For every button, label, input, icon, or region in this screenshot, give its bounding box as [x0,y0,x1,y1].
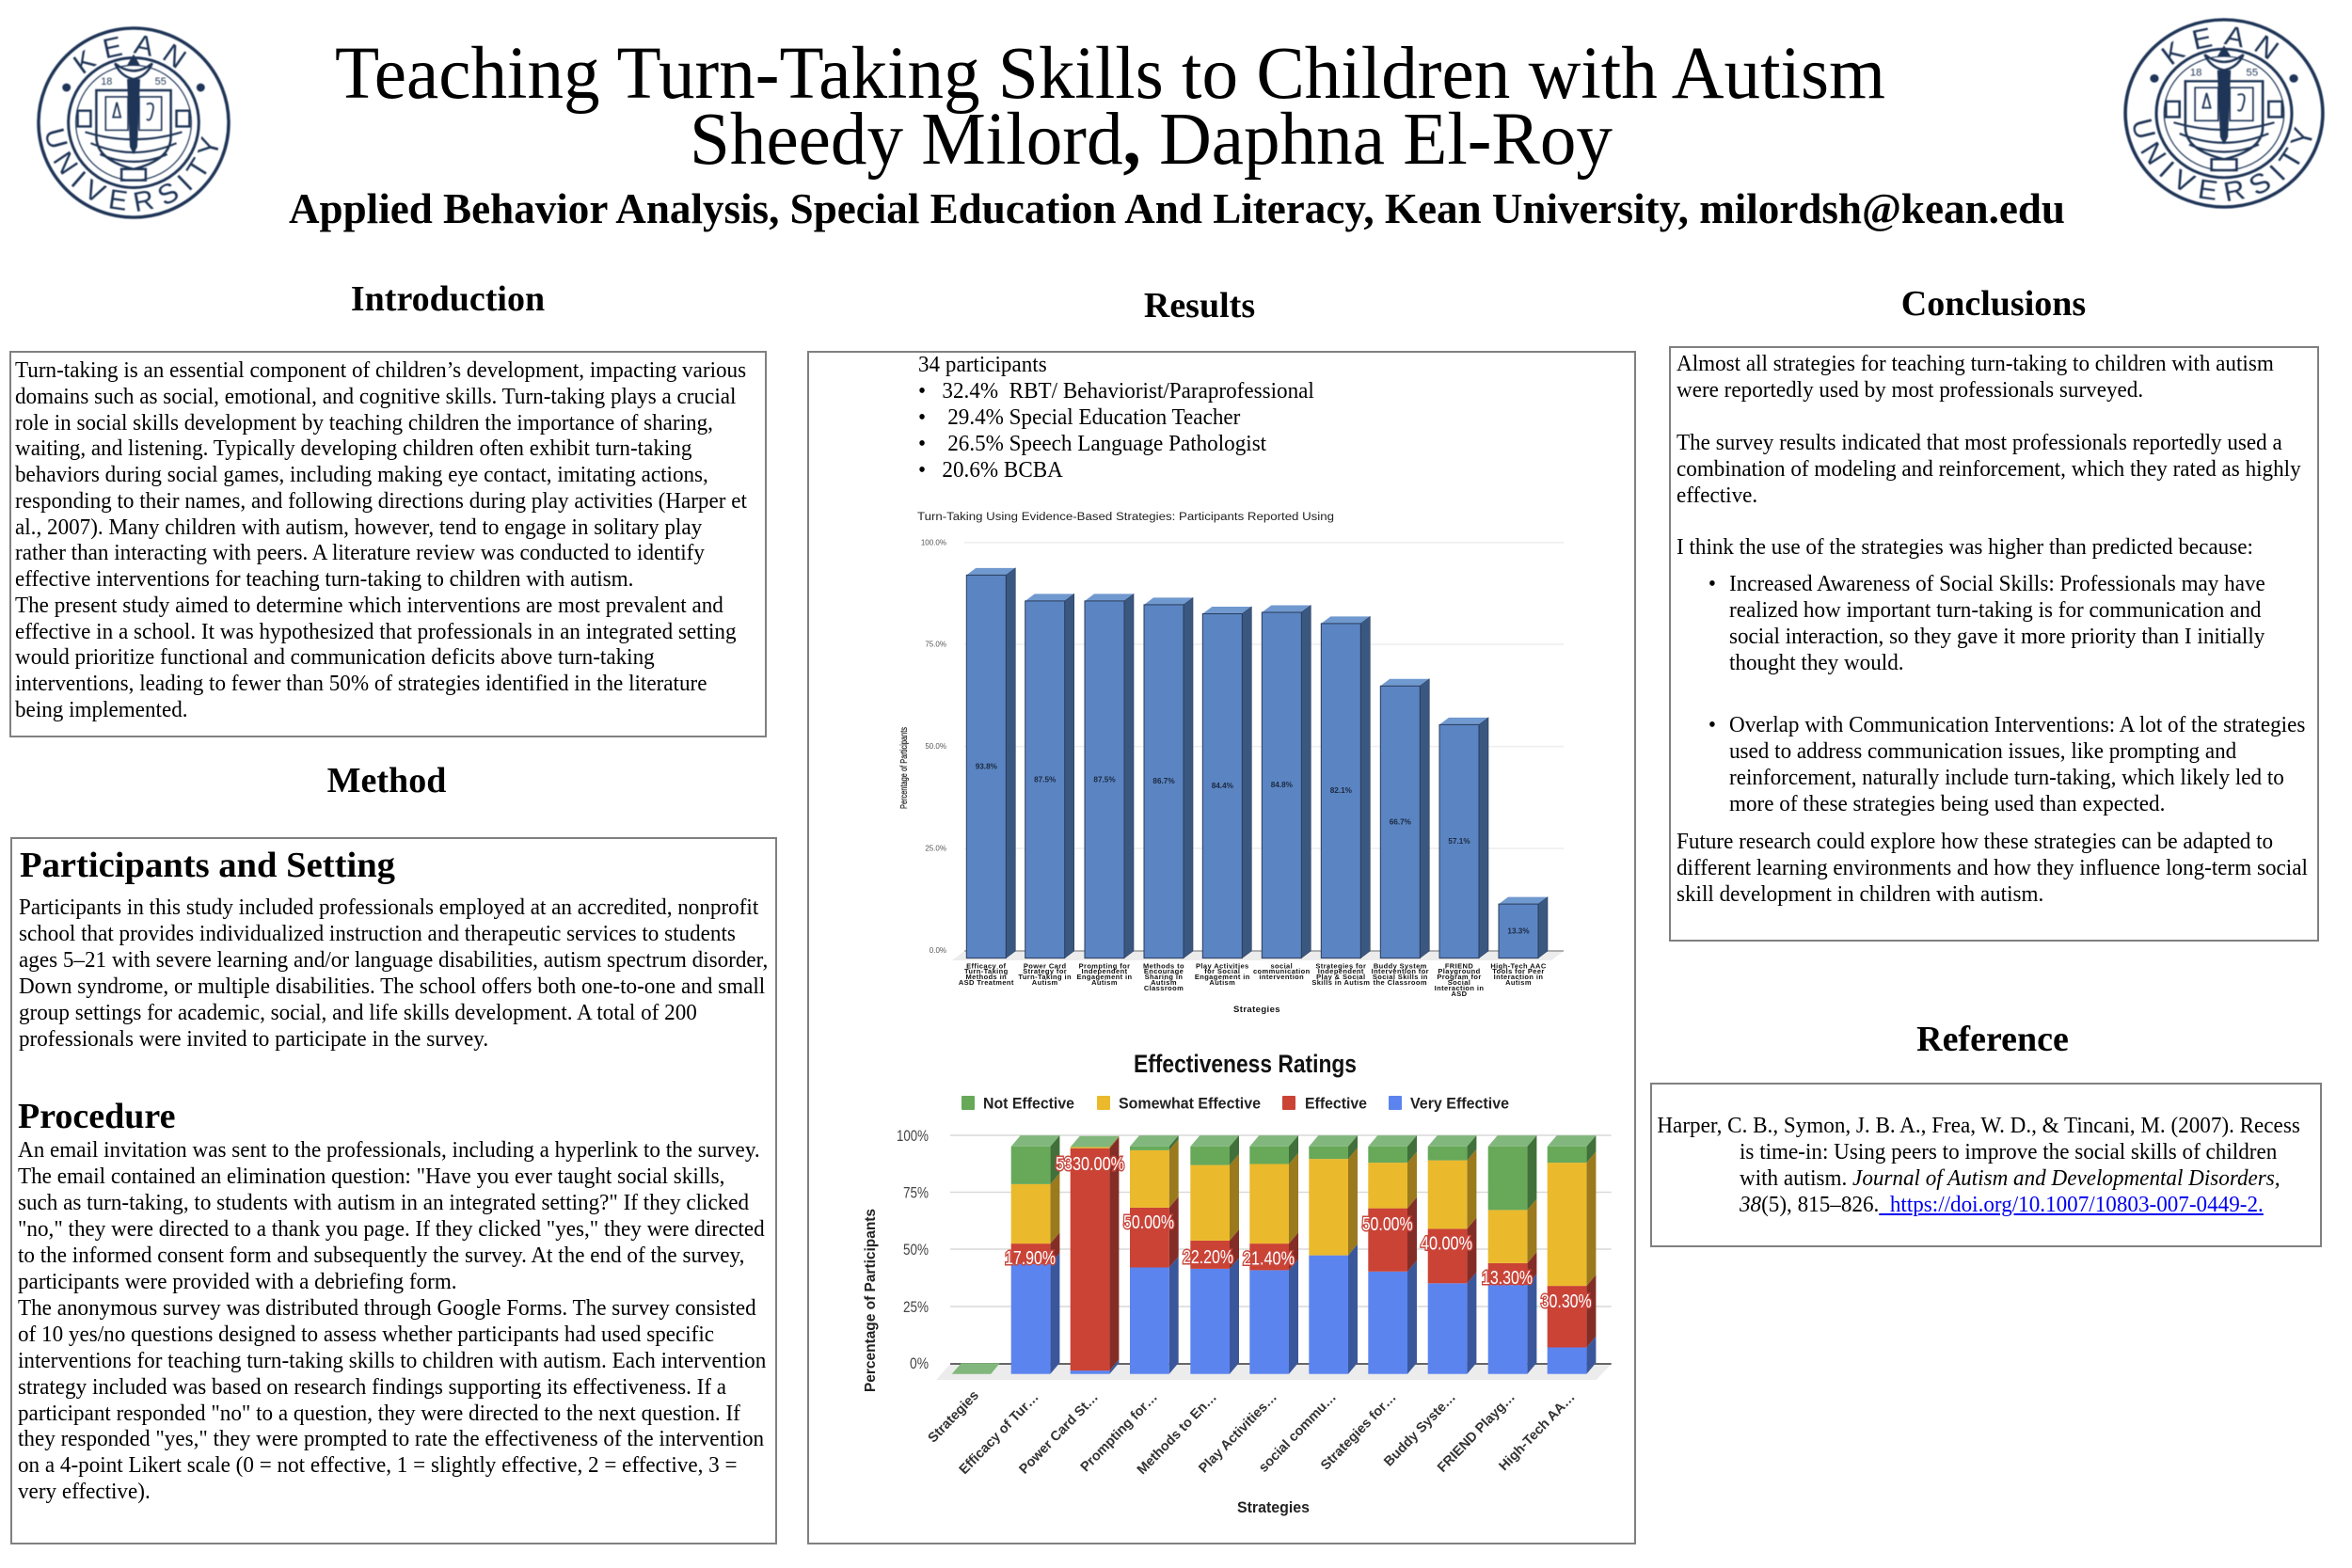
chart floor [952,951,1564,960]
bar chart: strategies participants reported using [899,512,1564,1015]
legend: Effective [1305,1095,1367,1112]
data labels: 13.30% [1482,1268,1533,1289]
x-axis category labels: Methods to [1143,961,1184,970]
x-axis category labels: Play Activities… [1196,1390,1280,1477]
heading: Method: Method [327,761,446,800]
data labels: 86.7% [1152,777,1175,785]
x-axis category labels: Skills in Autism [1311,978,1370,987]
stacked bars [1011,1135,1596,1374]
data labels: 30.30% [1541,1291,1592,1312]
data labels: 5330.00% [1056,1154,1124,1175]
x-axis category labels: Interaction in [1494,973,1543,981]
x-axis category labels: Play Activities [1196,961,1249,970]
x-axis category labels: Encourage [1144,967,1184,975]
x-axis category labels: Engagement in [1077,973,1132,981]
conclusions opening text: Almost all strategies for teaching turn-taking to children with autism were reportedly used by most professionals surveyed. The survey results indicated that most professionals reportedly used a combination of modeling and reinforcement, which they rated as highly effective. I think the use of the strategies was higher than predicted because: [1677,352,2301,560]
x-axis category labels: Turn-Taking in [1018,973,1072,981]
x-axis category labels: Autism [1505,978,1532,987]
x-axis category labels: Interaction in [1435,984,1484,992]
x-axis category labels: Playground [1438,967,1481,975]
panel: method [10,837,777,1544]
data labels: 22.20% [1183,1247,1233,1268]
x-axis category labels: Classroom [1144,984,1184,992]
procedure text: An email invitation was sent to the professionals, including a hyperlink to the survey. The email contained an elimination question: "Have you ever taught social skills, such as turn-taking, to students with autism in an integrated setting?" If they clicked "no," they were directed to a thank you page. If they clicked "yes," they were directed to the informed consent form and subsequently the survey. At the end of the survey, participants were provided with a debriefing form. The anonymous survey was distributed through Google Forms. The survey consisted of 10 yes/no questions designed to assess whether participants had used specific interventions for teaching turn-taking skills to children with autism. Each intervention strategy included was based on research findings supporting its effectiveness. If a participant responded "no" to a question, they were directed to the next question. If they responded "yes," they were prompted to rate the effectiveness of the intervention on a 4-point Likert scale (0 = not effective, 1 = slightly effective, 2 = effective, 3 = very effective). [18,1138,766,1504]
y-axis labels and grid: 100% [897,1127,929,1145]
logo: Kean University seal, left [36,25,231,220]
x-axis category labels: Strategy for [1023,967,1067,975]
logo: Kean University seal, right: KEAN [2160,26,2280,66]
bullet: overlap with communication interventions: Overlap with Communication Interventions: A lot of the strategies used to address communication issues, like prompting and reinforcement, naturally include turn-taking, which likely led to more of these strategies being used than expected. [1729,713,2305,816]
x-axis category labels: Prompting for [1079,961,1130,970]
data labels: 82.1% [1330,786,1353,795]
x-axis category labels: Efficacy of [966,961,1007,970]
x-axis category labels: Sharing in [1145,973,1183,981]
x-axis category labels: communication [1253,967,1311,975]
x-axis category labels: Independent [1318,967,1364,975]
logo: Kean University seal, right: UNIVERSITY [2132,119,2312,202]
panel: introduction [9,351,767,737]
x-axis category labels: Intervention for [1372,967,1429,975]
x-axis title: Strategies [1237,1498,1310,1516]
x-axis title: Strategies [1233,1005,1280,1015]
x-axis category labels: FRIEND [1445,961,1473,970]
chart title: Turn-Taking Using Evidence-Based Strategies: Participants Reported Using [917,512,1334,523]
participant breakdown list: 34 participants • 32.4% RBT/ Behaviorist/Paraprofessional • 29.4% Special Education Teacher • 26.5% Speech Language Pathologist • 20.6% BCBA [918,353,1314,483]
bars [966,568,1548,958]
x-axis category labels: ASD [1451,990,1468,998]
x-axis category labels: Autism [1151,978,1177,987]
x-axis category labels: Autism [1209,978,1235,987]
empty Strategies bar [952,1363,1000,1374]
data labels [1005,1154,1592,1312]
x-axis category labels: social [1270,961,1293,970]
logo: Kean University seal, left: KEAN [72,35,187,74]
x-axis category labels: Engagement in [1195,973,1250,981]
x-axis category labels: FRIEND Playg… [1435,1390,1518,1476]
logo: Kean University seal, left: 55 [155,76,167,87]
x-axis category labels: Buddy Syste… [1381,1390,1459,1469]
x-axis category labels: Turn-Taking [964,967,1009,975]
data labels: 57.1% [1448,837,1470,846]
x-axis category labels: Power Card St… [1016,1390,1102,1478]
subheading: Participants and Setting: Participants and Setting [20,846,395,885]
panel: conclusions: • [1708,572,1716,596]
panel: reference [1650,1083,2322,1247]
subheading: Procedure: Procedure [18,1097,175,1136]
x-axis category labels: for Social [1204,967,1240,975]
legend: Not Effective [983,1095,1074,1112]
affiliation line: Applied Behavior Analysis, Special Education And Literacy, Kean University, milordsh@kean.edu [289,184,2065,232]
x-axis category labels: Strategies for… [1318,1390,1400,1473]
x-axis category labels: Tools for Peer [1492,967,1545,975]
logo: Kean University seal, right [2122,17,2326,210]
logo: Kean University seal, left: 18 [101,76,112,87]
x-axis category labels: Social [1448,978,1470,987]
heading: Introduction: Introduction [351,279,545,319]
x-axis category labels: Autism [1032,978,1058,987]
x-axis category labels: social commu… [1256,1390,1340,1476]
x-axis category labels: Social Skills in [1373,973,1428,981]
x-axis category labels: Prompting for… [1078,1390,1161,1475]
data labels: 13.3% [1507,927,1530,935]
data labels: 84.8% [1271,781,1294,789]
y-axis title: Percentage of Participants [863,1209,879,1392]
y-axis labels and grid [897,1127,1612,1372]
y-axis labels and grid [921,538,1564,955]
participants text: Participants in this study included professionals employed at an accredited, nonprofit school that provides individualized instruction and therapeutic services to students ages 5–21 with severe learning and/or language disabilities, autism spectrum disorder, Down syndrome, or multiple disabilities. The school offers both one-to-one and small group settings for academic, social, and life skills development. A total of 200 professionals were invited to participate in the survey. [19,895,768,1052]
title: Teaching Turn-Taking Skills to Children with Autism [335,33,1885,115]
panel: conclusions: • [1708,713,1716,737]
x-axis category labels: Play & Social [1316,973,1365,981]
y-axis labels and grid: 75.0% [925,640,946,649]
heading: Conclusions: Conclusions [1901,284,2086,324]
x-axis category labels: Power Card [1024,961,1067,970]
x-axis category labels: ASD Treatment [959,978,1014,987]
logo: Kean University seal, right: 55 [2247,68,2258,78]
data labels: 87.5% [1034,775,1057,784]
x-axis category labels: High-Tech AA… [1497,1390,1579,1474]
y-axis labels and grid: 50% [903,1241,929,1259]
x-axis category labels: Autism [1091,978,1118,987]
panel: results [807,351,1636,1544]
chart floor [936,1364,1612,1380]
legend: Somewhat Effective [1119,1095,1261,1112]
data labels: 93.8% [976,762,998,770]
x-axis category labels: Strategies for [1315,961,1366,970]
x-axis category labels: intervention [1259,973,1304,981]
x-axis category labels: Methods to En… [1135,1390,1220,1478]
chart title: Effectiveness Ratings [1134,1050,1357,1078]
citation text: Harper, C. B., Symon, J. B. A., Frea, W. D., & Tincani, M. (2007). Recess is time-in: Using peers to improve the social skills of children with autism. Journal of Autism and Developmental Disorders, 38(5), 815–826. https://doi.org/10.1007/10803-007-0449-2. [1657,1114,2300,1217]
heading: Reference: Reference [1916,1020,2069,1059]
x-axis category labels [926,1388,1579,1478]
data labels: 50.00% [1123,1212,1174,1233]
x-axis category labels: Buddy System [1374,961,1427,970]
data labels: 66.7% [1390,817,1412,826]
legend: Very Effective [1410,1095,1509,1112]
x-axis category labels: High-Tech AAC [1490,961,1547,970]
x-axis category labels [959,961,1547,998]
y-axis labels and grid: 100.0% [921,538,946,547]
y-axis labels and grid: 75% [903,1183,929,1202]
x-axis category labels: Methods in [966,973,1007,981]
y-axis title: Percentage of Participants [899,727,910,809]
data labels: 17.90% [1005,1248,1056,1269]
authors: Sheedy Milord, Daphna El-Roy [690,99,1613,181]
introduction text: Turn-taking is an essential component of children’s development, impacting various domains such as social, emotional, and cognitive skills. Turn-taking plays a crucial role in social skills development by teaching children the importance of sharing, waiting, and listening. Typically developing children often exhibit turn-taking behaviors during social games, including making eye contact, imitating actions, responding to their names, and following directions during play activities (Harper et al., 2007). Many children with autism, however, tend to engage in solitary play rather than interacting with peers. A literature review was conducted to identify effective interventions for teaching turn-taking to children with autism. The present study aimed to determine which interventions are most prevalent and effective in a school. It was hypothesized that professionals in an integrated setting would prioritize functional and communication deficits above turn-taking interventions, leading to fewer than 50% of strategies identified in the literature being implemented. [15,358,747,722]
logo: Kean University seal, left: UNIVERSITY [45,128,219,213]
x-axis category labels: Independent [1082,967,1128,975]
x-axis category labels: Strategies [926,1388,982,1446]
y-axis labels and grid: 25.0% [925,845,946,852]
x-axis category labels: Program for [1437,973,1482,981]
x-axis category labels: the Classroom [1374,978,1427,987]
heading: Results: Results [1144,286,1255,325]
y-axis labels and grid: 0.0% [930,946,946,955]
logo: Kean University seal, right: 18 [2190,68,2201,78]
data labels: 40.00% [1421,1234,1472,1255]
legend [961,1095,1509,1112]
future research text: Future research could explore how these strategies can be adapted to different learning environments and how they influence long-term social skill development in children with autism. [1677,830,2308,907]
panel: conclusions [1669,346,2319,942]
y-axis labels and grid: 0% [910,1354,929,1372]
y-axis labels and grid: 25% [903,1298,929,1316]
y-axis labels and grid: 50.0% [925,742,946,751]
data labels [976,762,1530,935]
bullet: awareness of social skills: Increased Awareness of Social Skills: Professionals may have realized how important turn-taking is for communication and social interaction, so they gave it more priority than I initially thought they would. [1729,572,2265,675]
data labels: 84.4% [1212,782,1234,790]
data labels: 21.40% [1243,1249,1295,1270]
stacked bar chart: effectiveness ratings [863,1050,1612,1516]
data labels: 87.5% [1093,775,1116,784]
data labels: 50.00% [1362,1214,1413,1235]
x-axis category labels: Efficacy of Tur… [957,1390,1042,1478]
